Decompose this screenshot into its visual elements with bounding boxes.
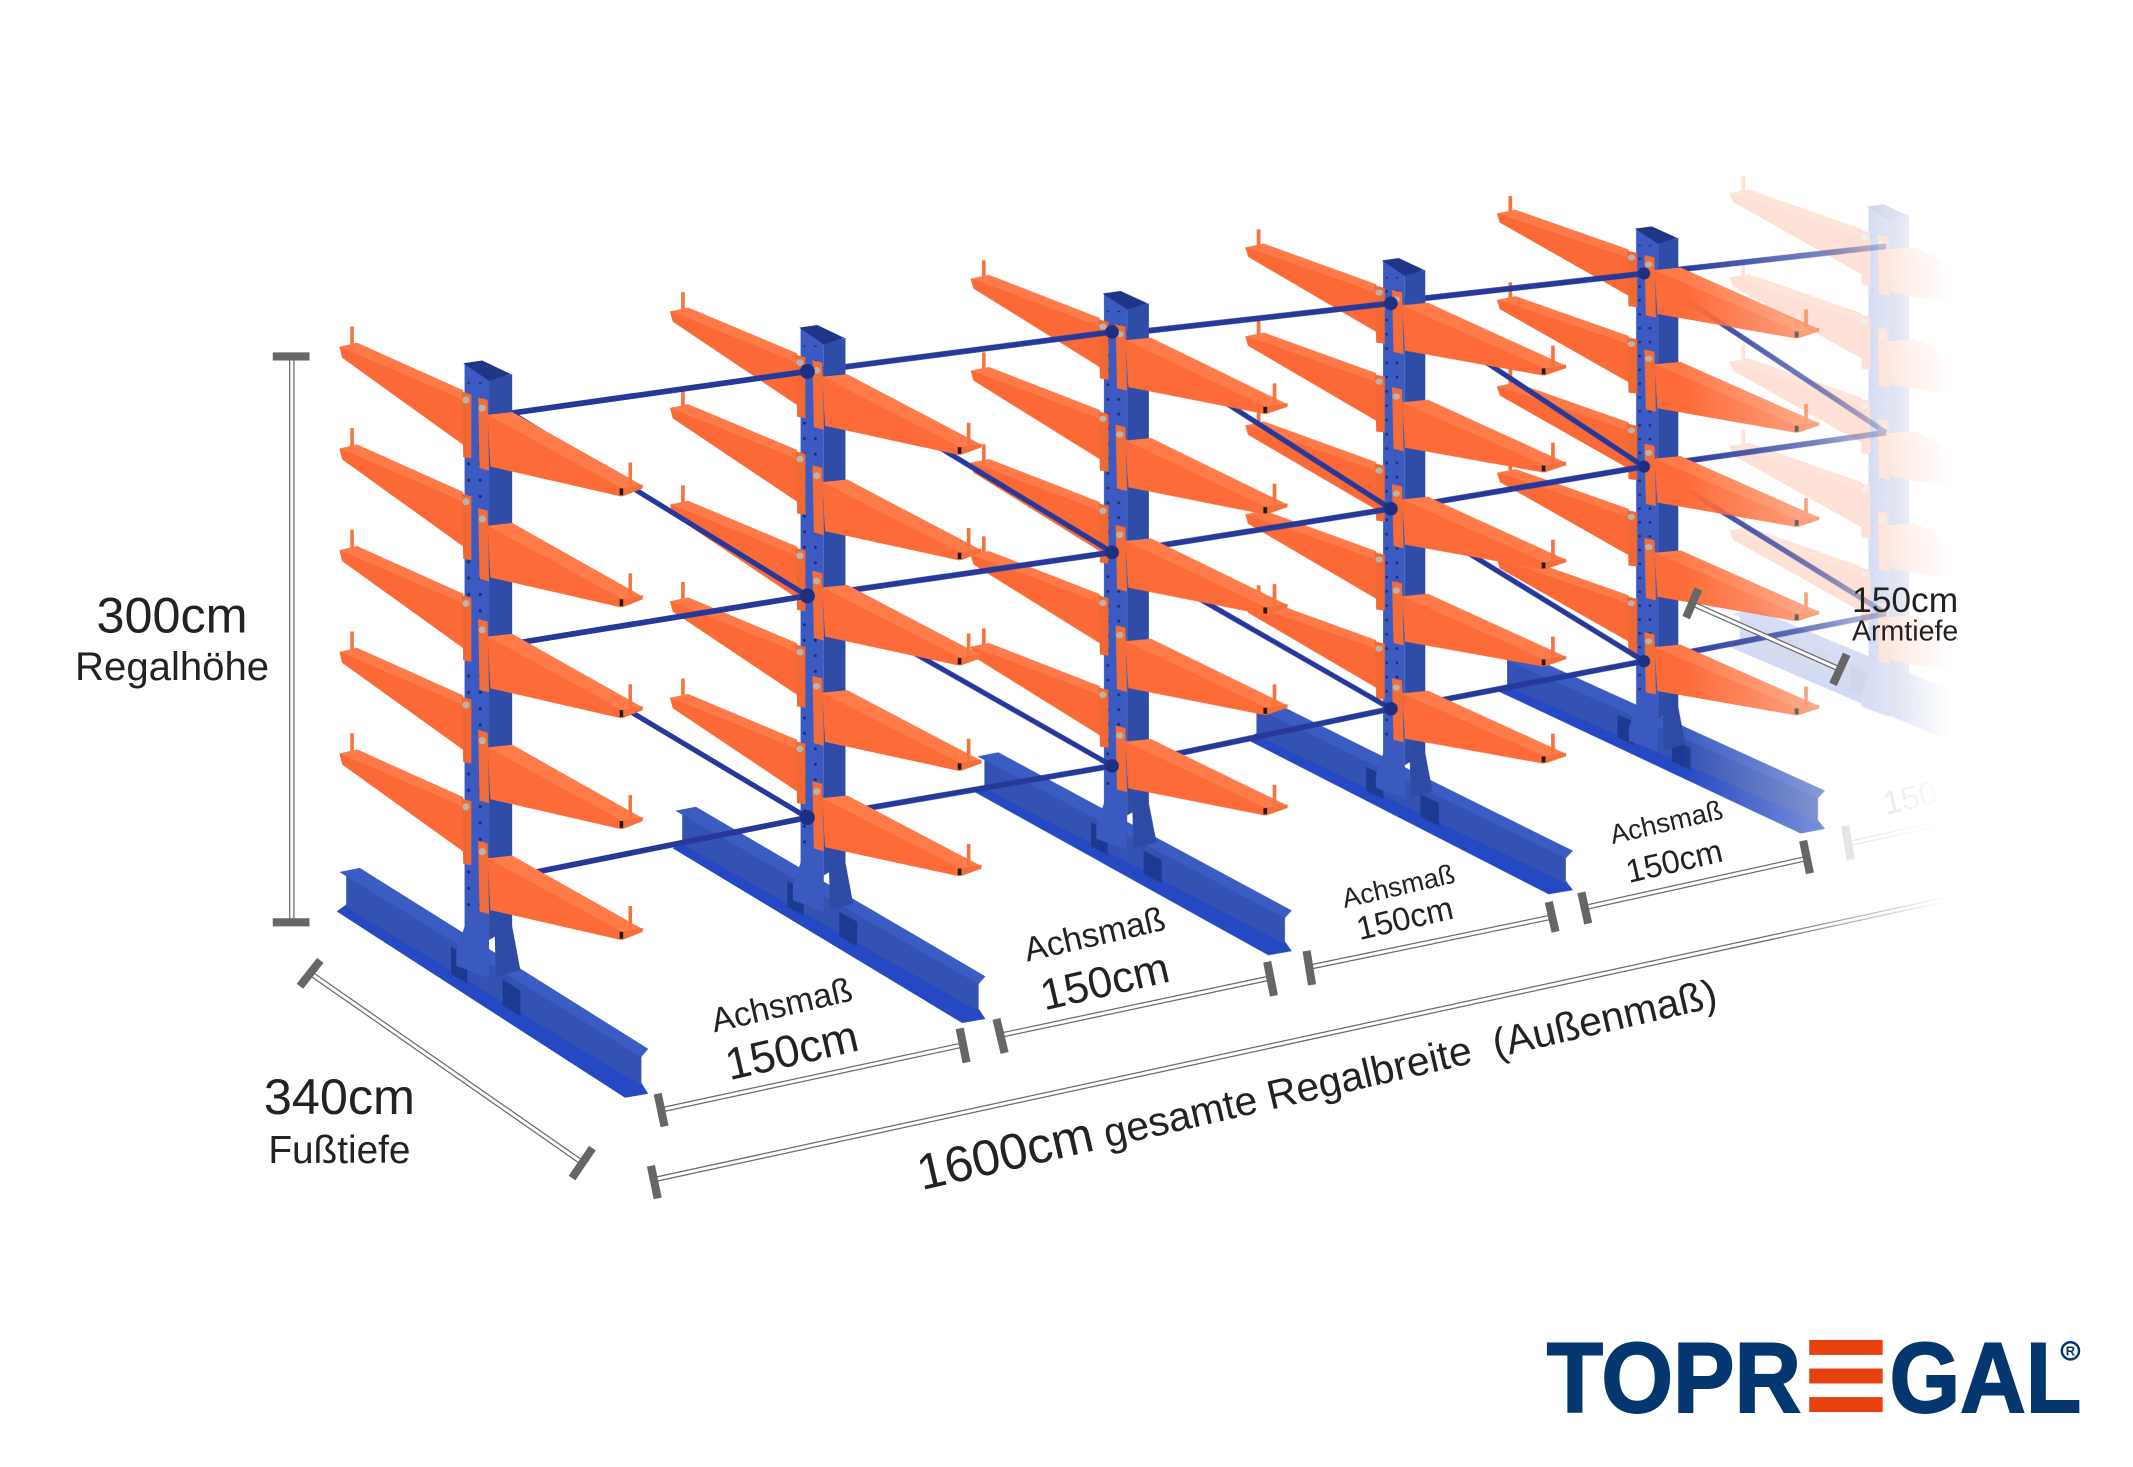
bracing between rack 3 and rack 4 [1126, 297, 1398, 765]
rack 1 [337, 326, 648, 1098]
dimension: Achsmaß 2 [996, 962, 1274, 1053]
rack 5 base beam [1498, 660, 1825, 834]
rack 6 base beam [1730, 612, 1935, 734]
rack 4 base beam [1246, 693, 1573, 902]
label: Achsmaß 150cm 3 [1339, 858, 1458, 947]
label: Achsmaß 150cm 1: Achsmaß [708, 971, 856, 1040]
dimension: faded Achsmaß 5 [1841, 784, 1922, 860]
label: Achsmaß 150cm 1: 150cm [720, 1010, 863, 1090]
logo: TOPREGAL: GAL [1890, 1323, 2081, 1434]
label: 300cm Regalhöhe [75, 587, 269, 689]
rack 1 base beam [337, 868, 648, 1098]
label: 150cm Armtiefe [1852, 581, 1958, 648]
label: Achsmaß 150cm 1 [708, 971, 863, 1090]
label: 300cm Regalhöhe: 300cm [97, 587, 248, 644]
rack 1 arms [339, 326, 643, 940]
dimension: Achsmaß 4 [1581, 841, 1810, 924]
rack 3 base beam [975, 747, 1292, 961]
rack 4 arms [1245, 227, 1566, 766]
rack 2 arms [670, 292, 982, 876]
rack 1 column [456, 360, 520, 978]
rack 5 column [1629, 226, 1686, 751]
label: 340cm Fußtiefe: Fußtiefe [268, 1129, 410, 1172]
logo: red bars [1809, 1340, 1883, 1412]
bracing between rack 2 and rack 3 [821, 325, 1119, 816]
rack 2 column [793, 325, 853, 912]
rack 3 [971, 260, 1292, 961]
bracing between rack 5 and rack 6 [1656, 246, 1886, 658]
label: 340cm Fußtiefe: 340cm [264, 1068, 415, 1125]
rack 3 arms [971, 260, 1288, 815]
label: 150cm Armtiefe: 150cm [1852, 581, 1958, 620]
rack 4 column [1376, 258, 1433, 798]
dimension: arm depth 150cm [1686, 589, 1847, 684]
rack 2 base beam [673, 804, 985, 1025]
logo: TOPREGAL: TOPR [1547, 1323, 1801, 1434]
label: 300cm Regalhöhe: Regalhöhe [75, 644, 269, 689]
rack 5 [1497, 194, 1825, 849]
rack 3 column [1096, 291, 1157, 850]
bracing between rack 1 and rack 2 [489, 364, 815, 882]
logo: registered mark [2062, 1342, 2079, 1359]
dimension: height 300cm [273, 356, 309, 922]
logo: TOPREGAL [1547, 1323, 2081, 1434]
label: 340cm Fußtiefe [264, 1068, 415, 1172]
rack 4 [1245, 227, 1573, 902]
label: Achsmaß 150cm 4: Achsmaß [1607, 794, 1726, 850]
rack 5 arms [1497, 194, 1819, 718]
dimension: Achsmaß 1 [658, 1028, 967, 1126]
faded rack 6 [1730, 176, 1935, 734]
dimension: depth 340cm [300, 960, 592, 1178]
dimension: Achsmaß 3 [1307, 902, 1556, 985]
label: Achsmaß 150cm 3: Achsmaß [1339, 858, 1458, 914]
logo: registered mark: R [2066, 1344, 2076, 1359]
rack 6 column [1861, 204, 1910, 717]
label: 1600cm gesamte Regalbreite: 1600cm gesamte Regalbreite (Außenmaß) [911, 961, 1722, 1201]
label: Achsmaß 150cm 4: 150cm [1622, 832, 1726, 890]
dimension: faded Achsmaß 5: 150cm [1879, 764, 1983, 822]
label: Achsmaß 150cm 4 [1607, 794, 1726, 890]
label: Achsmaß 150cm 2: 150cm [1036, 944, 1174, 1020]
label: Achsmaß 150cm 2 [1020, 900, 1174, 1020]
rack 6 arms [1730, 176, 1934, 710]
label: Achsmaß 150cm 3: 150cm [1353, 889, 1457, 947]
rack 2 [670, 292, 985, 1025]
label: 150cm Armtiefe: Armtiefe [1852, 616, 1958, 648]
bracing between rack 4 and rack 5 [1403, 267, 1650, 707]
label: Achsmaß 150cm 2: Achsmaß [1020, 900, 1169, 969]
dimension: total width 1600cm [651, 899, 1947, 1198]
